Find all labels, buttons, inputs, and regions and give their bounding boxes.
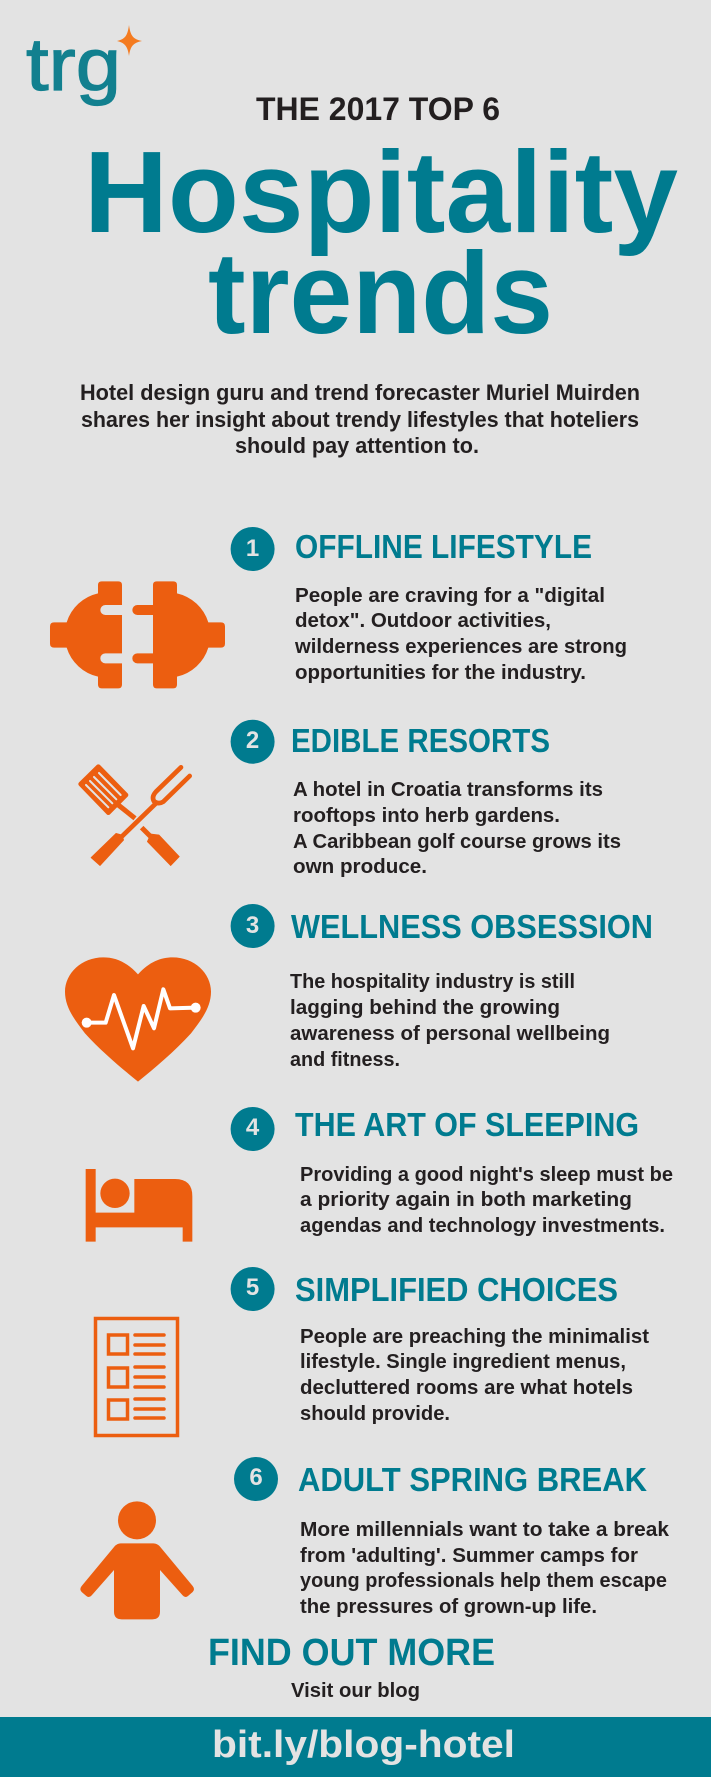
heading: wellness obsession: WELLNESS OBSESSION (291, 908, 653, 945)
number badge 4: 4 (246, 1114, 260, 1141)
panel: trend 1 offline lifestyle (50, 527, 627, 688)
body text 4 (300, 1164, 673, 1237)
body text 5: should provide. (300, 1403, 450, 1425)
number badge 3: 3 (246, 912, 259, 939)
footer band with link (0, 1717, 711, 1777)
panel: trend 3 wellness obsession (65, 904, 653, 1082)
body text 1: People are craving for a "digital (295, 585, 605, 607)
number badge 4 (231, 1107, 275, 1151)
number badge 2: 2 (246, 727, 259, 754)
title: trends (208, 228, 553, 358)
intro text: Hotel design guru and trend forecaster Muriel Muirden (80, 380, 640, 405)
body text 3: awareness of personal wellbeing (290, 1023, 610, 1045)
body text 2: own produce. (293, 856, 427, 878)
title: Hospitality (84, 127, 678, 257)
number badge 6 (234, 1457, 278, 1501)
number badge 5: 5 (246, 1274, 259, 1301)
icon: checklist (96, 1318, 178, 1436)
body text 6: the pressures of grown-up life. (300, 1596, 597, 1618)
body text 3 (290, 971, 610, 1071)
number badge 2 (231, 720, 275, 764)
heading: edible resorts: EDIBLE RESORTS (291, 722, 550, 759)
heading: simplified choices: SIMPLIFIED CHOICES (295, 1271, 618, 1308)
body text 3: and fitness. (290, 1049, 400, 1071)
title (84, 127, 678, 358)
number badge 1: 1 (246, 535, 259, 562)
icon: plug (50, 581, 225, 688)
number badge 1 (231, 527, 275, 571)
heading: find out more: FIND OUT MORE (208, 1632, 495, 1674)
body text 5 (300, 1326, 649, 1425)
body text 2: A hotel in Croatia transforms its (293, 779, 603, 801)
heading: the art of sleeping: THE ART OF SLEEPING (295, 1106, 639, 1143)
panel: trend 2 edible resorts (81, 720, 621, 878)
body text 4: Providing a good night's sleep must be (300, 1164, 673, 1186)
number badge 3 (231, 904, 275, 948)
body text 6 (300, 1519, 670, 1618)
body text 2: rooftops into herb gardens. (293, 805, 560, 827)
icon: heart with pulse (65, 957, 211, 1082)
body text 5: People are preaching the minimalist (300, 1326, 649, 1348)
body text 1: opportunities for the industry. (295, 662, 586, 684)
body text 3: The hospitality industry is still (290, 971, 575, 993)
footer band with link: bit.ly/blog-hotel (212, 1724, 515, 1766)
body text 5: decluttered rooms are what hotels (300, 1377, 633, 1399)
number badge 5 (231, 1267, 275, 1311)
body text 2 (293, 779, 621, 878)
text: visit our blog: Visit our blog (291, 1680, 420, 1702)
body text 1: detox". Outdoor activities, (295, 610, 551, 632)
body text 5: lifestyle. Single ingredient menus, (300, 1351, 626, 1373)
heading: adult spring break: ADULT SPRING BREAK (298, 1461, 647, 1498)
heading: the 2017 top 6: THE 2017 TOP 6 (256, 91, 500, 127)
intro text: should pay attention to. (235, 433, 479, 458)
body text 1: wilderness experiences are strong (294, 636, 627, 658)
intro text (80, 380, 640, 458)
body text 4: a priority again in both marketing (300, 1189, 632, 1211)
logo: trg: trg (26, 23, 121, 106)
panel: trend 4 the art of sleeping (86, 1106, 673, 1242)
body text 2: A Caribbean golf course grows its (293, 831, 621, 853)
icon: person (80, 1501, 194, 1619)
body text 3: lagging behind the growing (290, 997, 560, 1019)
panel: trend 6 adult spring break (80, 1457, 670, 1619)
body text 6: young professionals help them escape (300, 1570, 667, 1592)
number badge 6: 6 (249, 1464, 263, 1491)
heading: offline lifestyle: OFFLINE LIFESTYLE (295, 528, 592, 565)
body text 6: More millennials want to take a break (300, 1519, 670, 1541)
panel: trend 5 simplified choices (96, 1267, 649, 1436)
body text 6: from 'adulting'. Summer camps for (300, 1545, 638, 1567)
icon: bed (86, 1169, 192, 1242)
intro text: shares her insight about trendy lifestyles that hoteliers (81, 407, 639, 432)
body text 4: agendas and technology investments. (300, 1215, 665, 1237)
icon: crossed spatula and fork (81, 767, 190, 866)
body text 1 (294, 585, 627, 684)
